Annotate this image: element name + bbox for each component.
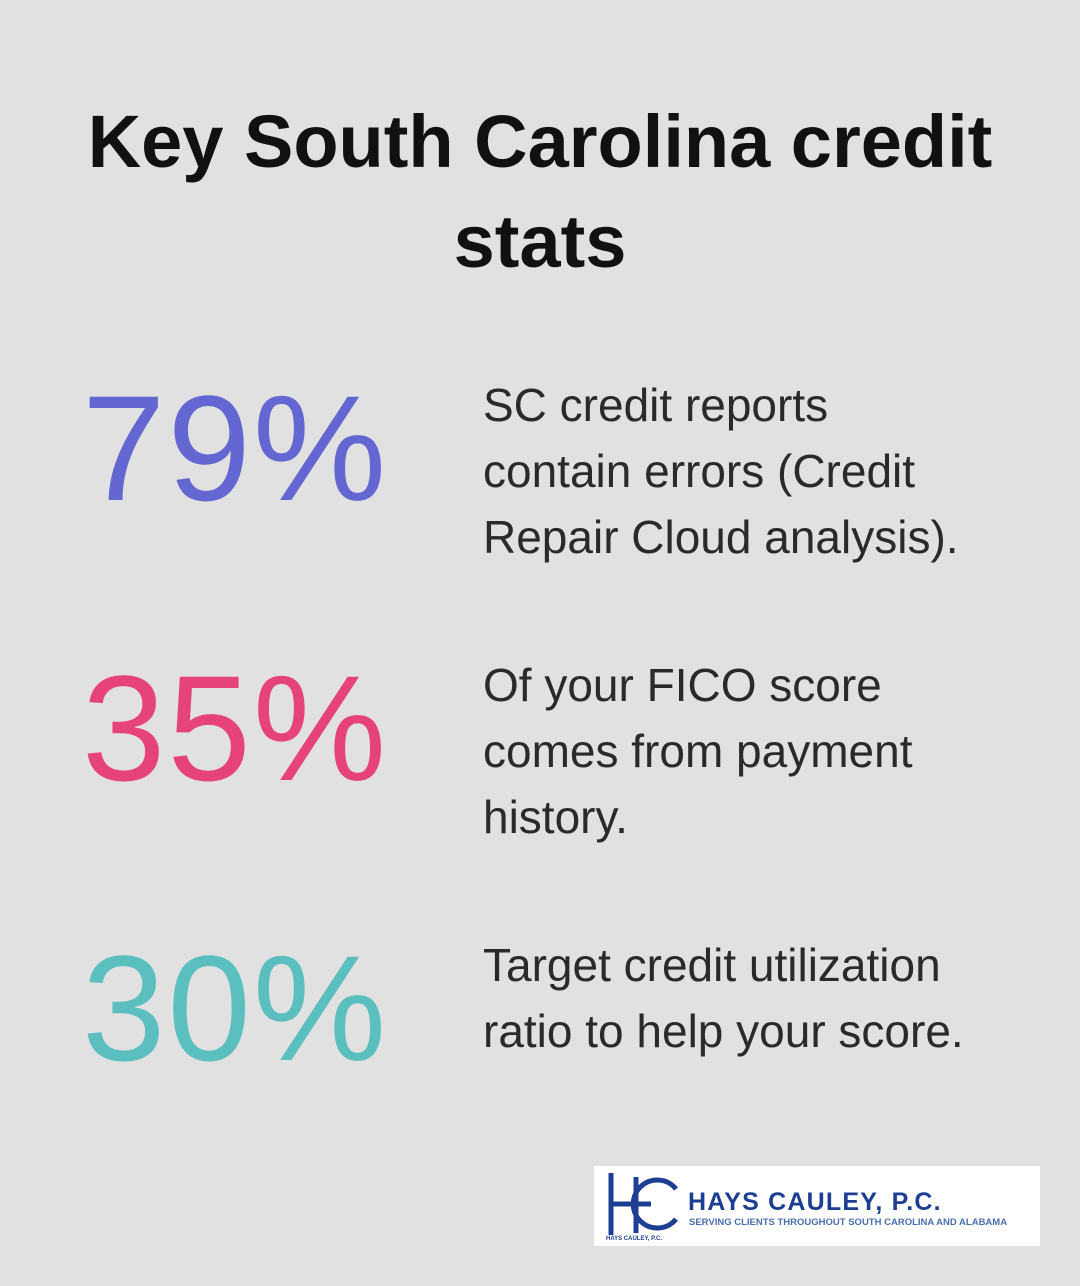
stat 3 (82, 924, 964, 1092)
number 79%: 79% (82, 364, 388, 532)
title (88, 100, 992, 283)
number 35%: 35% (82, 644, 388, 812)
logo small text: HAYS CAULEY, P.C. (606, 1236, 662, 1242)
text 2 (483, 659, 912, 843)
text 2: history. (483, 791, 628, 843)
text 1 (483, 379, 959, 563)
title: stats (454, 200, 626, 283)
logo icon (608, 1173, 678, 1235)
title: Key South Carolina credit (88, 100, 992, 183)
text 1: SC credit reports (483, 379, 828, 431)
text 1: Repair Cloud analysis). (483, 511, 959, 563)
logo (594, 1166, 1040, 1246)
text 3: ratio to help your score. (483, 1005, 964, 1057)
text 1: contain errors (Credit (483, 445, 915, 497)
logo tagline: SERVING CLIENTS THROUGHOUT SOUTH CAROLINA AND ALABAMA (689, 1217, 1007, 1228)
stat 1 (82, 364, 959, 563)
text 3 (483, 939, 964, 1057)
text 2: comes from payment (483, 725, 912, 777)
number 30%: 30% (82, 924, 388, 1092)
stat 2 (82, 644, 912, 843)
logo name: HAYS CAULEY, P.C. (688, 1188, 942, 1216)
text 3: Target credit utilization (483, 939, 941, 991)
text 2: Of your FICO score (483, 659, 882, 711)
